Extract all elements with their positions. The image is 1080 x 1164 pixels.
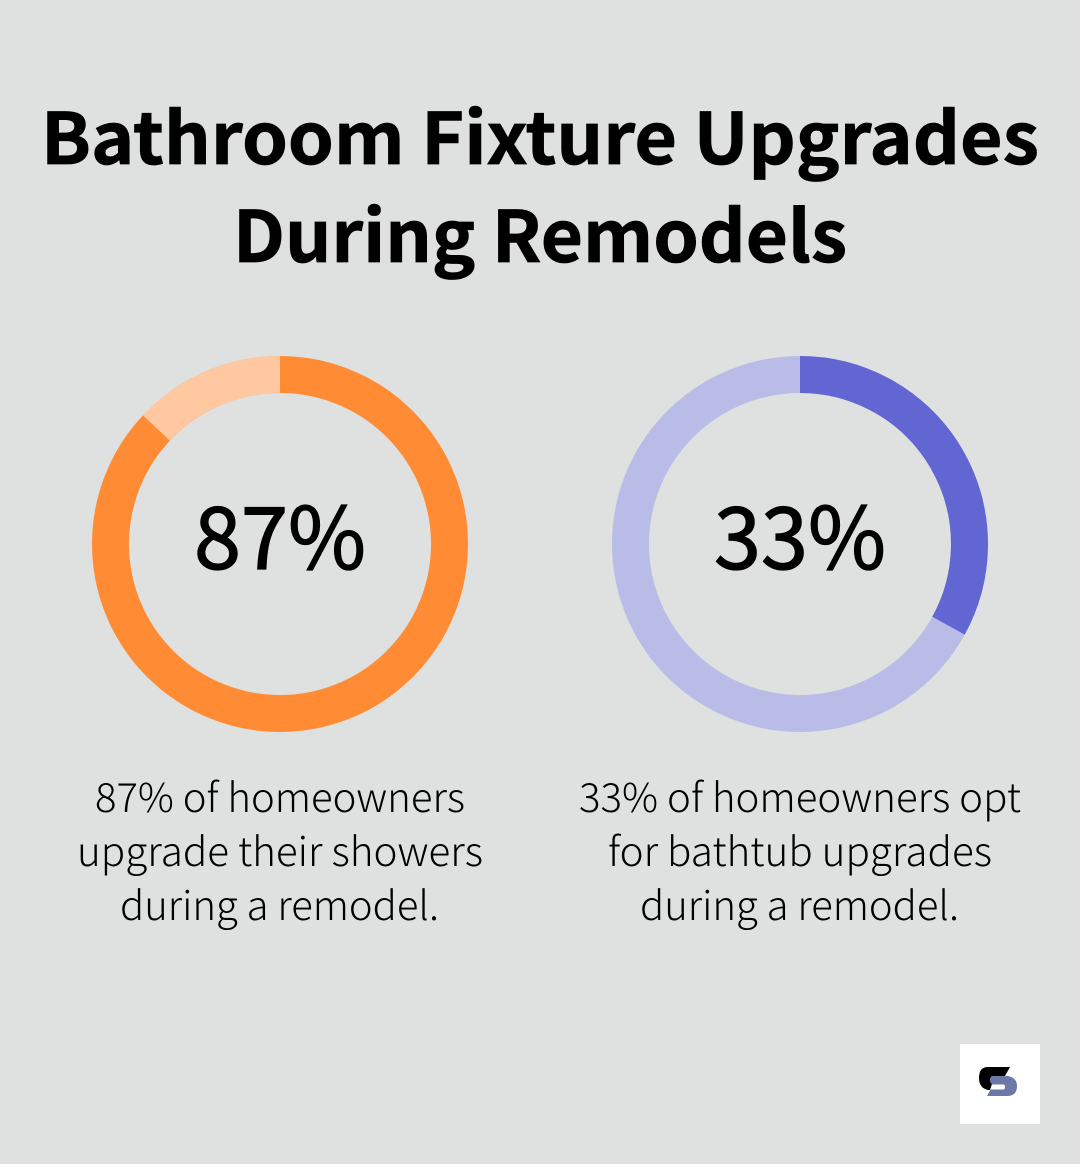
description: showers: during a remodel. xyxy=(120,874,439,932)
donut chart: 87% xyxy=(110,374,450,714)
description: bathtubs: for bathtub upgrades xyxy=(608,820,992,878)
donut chart: 33% xyxy=(630,374,970,714)
title: Bathroom Fixture Upgrades xyxy=(41,83,1039,185)
description: showers: 87% of homeowners xyxy=(95,766,465,824)
description: bathtubs: during a remodel. xyxy=(640,874,959,932)
logo badge xyxy=(960,1044,1040,1124)
description: bathtubs: 33% of homeowners opt xyxy=(579,766,1021,824)
value: 87%: 87% xyxy=(194,469,366,594)
title xyxy=(41,83,1039,283)
panel: bathtubs 33% xyxy=(579,374,1021,932)
panel: showers 87% xyxy=(77,374,483,932)
title: During Remodels xyxy=(233,181,847,283)
description: bathtubs xyxy=(579,766,1021,932)
value: 33%: 33% xyxy=(714,469,886,594)
description: showers: upgrade their showers xyxy=(77,820,483,878)
description: showers xyxy=(77,766,483,932)
